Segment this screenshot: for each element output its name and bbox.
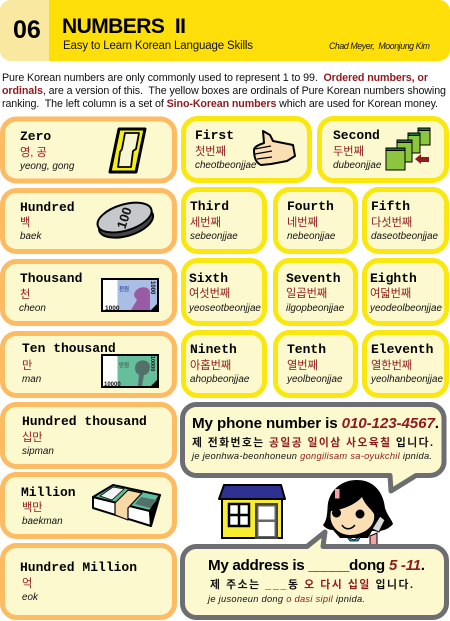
panel: eighth: Eighth: [370, 271, 417, 286]
panel: fifth: daseotbeonjjae: [371, 231, 438, 242]
panel: fourth: nebeonjjae: [287, 231, 336, 242]
panel: sixth: 여섯번째: [189, 287, 230, 300]
speech bubble: address: je jusoneun dong o dasi sipil ipnida.: [206, 594, 365, 604]
icon: coin: 100: [114, 205, 135, 231]
panel: ten thousand: 만: [22, 359, 32, 372]
panel: thousand: cheon: [19, 303, 46, 314]
header banner: Chad Meyer, Moonjung Kim: [329, 41, 430, 51]
panel: zero: yeong, gong: [19, 161, 75, 172]
panel: tenth: yeolbeonjjae: [286, 374, 343, 385]
panel: fifth: Fifth: [371, 199, 410, 214]
panel: hundred million: Hundred Million: [20, 560, 137, 575]
panel: fifth: 다섯번째: [371, 216, 412, 229]
panel: first: First: [195, 128, 234, 143]
illustration: house: [219, 485, 285, 538]
panel: third: sebeonjjae: [190, 231, 238, 242]
panel: fourth: [276, 190, 356, 252]
panel: ten thousand: [2, 334, 174, 396]
panel: zero: 영, 공: [20, 146, 47, 159]
header banner: Easy to Learn Korean Language Skills: [63, 40, 253, 52]
panel: second: [320, 118, 446, 180]
intro paragraph: Pure Korean numbers are only commonly used to represent 1 to 99. Ordered numbers, or: [2, 72, 428, 84]
panel: fifth: [364, 190, 446, 252]
panel: third: Third: [190, 199, 229, 214]
panel: eleventh: yeolhanbeonjjae: [370, 374, 443, 385]
panel: ninth: ahopbeonjjae: [190, 374, 250, 385]
panel: sixth: [184, 260, 264, 324]
panel: million: [2, 474, 174, 536]
icon: bundle of bills: [93, 485, 160, 526]
panel: million: 백만: [22, 501, 43, 514]
intro paragraph: [2, 72, 446, 110]
icon: 10000 won bill: [102, 355, 158, 388]
panel: eighth: [364, 260, 446, 324]
panel: million: Million: [21, 485, 76, 500]
panel: hundred: baek: [20, 231, 42, 242]
panel: eighth: yeodeolbeonjjae: [369, 303, 442, 314]
panel: hundred thousand: [2, 404, 174, 466]
panel: hundred thousand: 십만: [22, 431, 43, 444]
icon: 1000 won bill: 1000: [149, 281, 155, 295]
icon: 1000 won bill: 천원: [119, 285, 129, 293]
panel: ten thousand: man: [22, 374, 42, 385]
panel: ninth: Nineth: [190, 342, 237, 357]
panel: hundred thousand: sipman: [22, 446, 54, 457]
panel: first: cheotbeonjjae: [195, 160, 257, 171]
speech bubble: phone number: [182, 404, 444, 491]
panel: seventh: ilgopbeonjjae: [286, 303, 345, 314]
intro paragraph: ranking. The left column is a set of Sino-Korean numbers which are used for Korean money.: [2, 98, 438, 110]
panel: thousand: Thousand: [20, 271, 82, 286]
panel: ninth: 아홉번째: [190, 358, 231, 372]
icon: 1000 won bill: 1000: [105, 305, 120, 312]
panel: seventh: Seventh: [286, 271, 341, 286]
panel: tenth: [276, 332, 356, 396]
icon: digit zero: [110, 129, 145, 172]
speech bubble: address: 제 주소는 ___동 오 다시 십일 입니다.: [210, 577, 413, 591]
icon: thumbs up: [254, 131, 295, 165]
panel: hundred: [2, 190, 174, 252]
icon: green boxes with arrow: [386, 128, 430, 170]
panel: hundred: Hundred: [20, 200, 75, 215]
panel: tenth: Tenth: [287, 342, 326, 357]
panel: thousand: [2, 262, 174, 324]
panel: sixth: Sixth: [189, 271, 228, 286]
header banner: [0, 0, 450, 61]
panel: first: [184, 118, 310, 180]
panel: eleventh: Eleventh: [371, 342, 434, 357]
icon: 10000 won bill: 만원: [119, 361, 129, 369]
speech bubble: phone number: My phone number is 010-123-4567.: [192, 415, 439, 432]
icon: coin: [94, 197, 157, 243]
panel: sixth: yeoseotbeonjjae: [188, 303, 261, 314]
panel: hundred million: eok: [22, 592, 39, 603]
illustration: girl on the phone: [323, 480, 393, 548]
panel: hundred million: [2, 546, 174, 618]
panel: zero: [2, 119, 174, 181]
panel: eleventh: [364, 332, 446, 396]
panel: tenth: 열번째: [287, 359, 318, 372]
panel: fourth: 네번째: [287, 216, 318, 229]
panel: million: baekman: [22, 516, 63, 527]
panel: second: Second: [333, 128, 380, 143]
panel: ten thousand: Ten thousand: [22, 341, 116, 356]
panel: second: 두번째: [333, 145, 364, 158]
panel: fourth: Fourth: [287, 199, 334, 214]
icon: 10000 won bill: 10000: [149, 356, 155, 371]
icon: 1000 won bill: [102, 279, 158, 312]
panel: hundred: 백: [20, 216, 30, 229]
panel: third: [184, 190, 264, 252]
header banner: 06: [13, 16, 41, 44]
panel: ninth: [184, 332, 264, 396]
panel: seventh: 일곱번째: [286, 286, 327, 300]
panel: hundred thousand: Hundred thousand: [22, 414, 147, 429]
panel: eleventh: 열한번째: [371, 359, 412, 372]
intro paragraph: ordinals, are a version of this. The yellow boxes are ordinals of Pure Korean numbers showing: [2, 85, 446, 97]
speech bubble: address: [182, 532, 446, 618]
speech bubble: phone number: je jeonhwa-beonhoneun gongilisam sa-oyukchil ipnida.: [190, 451, 432, 461]
panel: seventh: [276, 260, 356, 324]
panel: first: 첫번째: [195, 145, 226, 158]
panel: eighth: 여덟번째: [370, 287, 411, 300]
panel: thousand: 천: [20, 287, 30, 301]
panel: hundred million: 억: [22, 577, 32, 590]
icon: 10000 won bill: 10000: [104, 382, 121, 388]
header banner: NUMBERS II: [62, 15, 186, 38]
speech bubble: address: My address is _____dong 5 -11.: [208, 557, 425, 574]
panel: second: dubeonjjae: [333, 160, 382, 171]
panel: third: 세번째: [190, 216, 221, 229]
speech bubble: phone number: 제 전화번호는 공일공 일이삼 사오육칠 입니다.: [192, 435, 433, 449]
panel: zero: Zero: [20, 129, 51, 144]
